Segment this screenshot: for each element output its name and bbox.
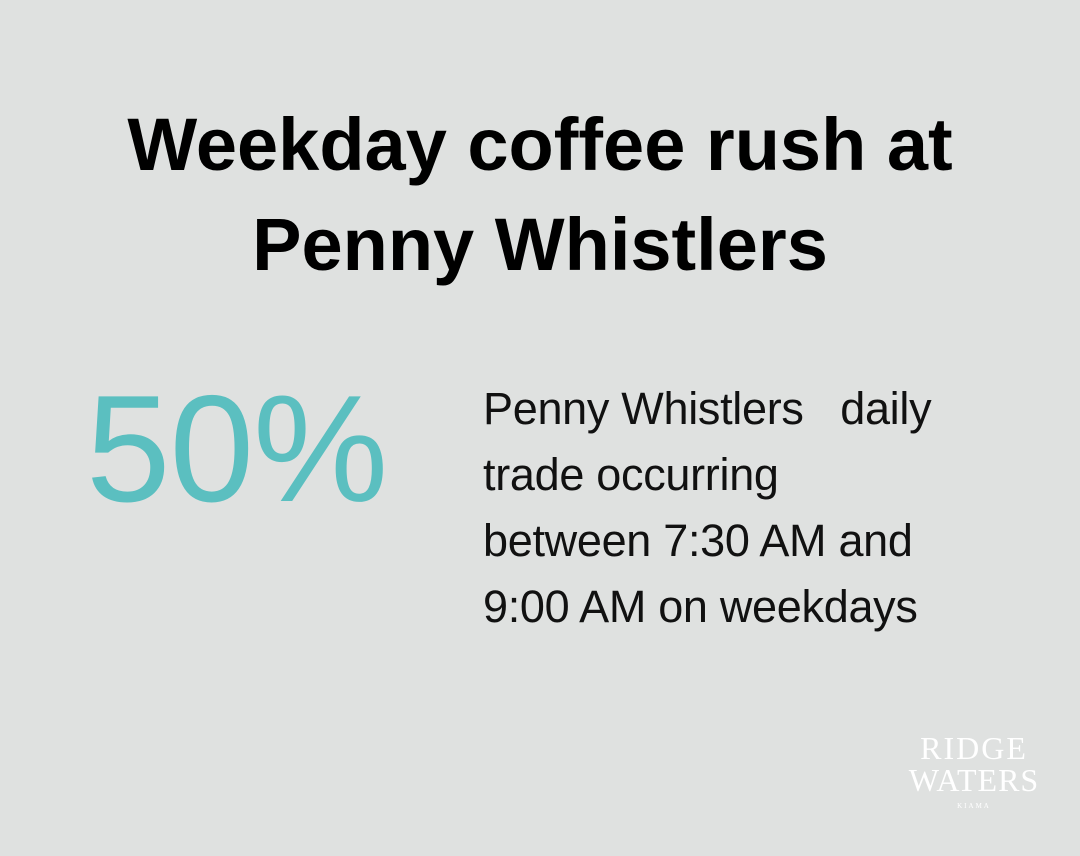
- stat description: Penny Whistlers daily: [483, 383, 931, 434]
- stat number: 50%: [86, 364, 387, 534]
- title: Weekday coffee rush at: [127, 103, 953, 186]
- stat description: trade occurring: [483, 449, 779, 500]
- stat description: between 7:30 AM and: [483, 515, 913, 566]
- title: [127, 103, 953, 286]
- logo: WATERS: [909, 762, 1039, 798]
- logo: [908, 730, 1039, 810]
- stat description: [483, 383, 932, 632]
- logo: RIDGE: [920, 730, 1028, 766]
- logo: KIAMA: [957, 802, 991, 810]
- title: Penny Whistlers: [252, 203, 828, 286]
- stat description: 9:00 AM on weekdays: [483, 581, 918, 632]
